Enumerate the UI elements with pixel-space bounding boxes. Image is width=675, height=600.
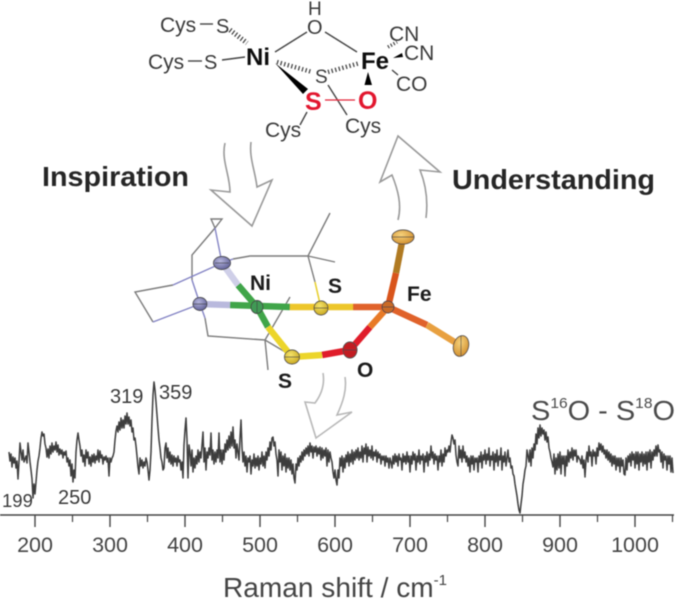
x axis tick labels: 500 (242, 533, 278, 557)
arrow: understanding, pointing up (380, 136, 440, 220)
red S-O unit with wedge bonds (275, 63, 377, 125)
diagram: crystal structure of the Ni-Fe complex (135, 213, 471, 393)
ligand bonds to nitrogen (153, 228, 233, 322)
peak labels: 250 (58, 487, 91, 509)
Cys-S ligands on Ni: S (216, 16, 229, 38)
x axis tick labels (17, 533, 659, 557)
Cys-S ligands on Ni: Cys (148, 51, 184, 74)
spectrum trace (9, 382, 673, 513)
ligand wireframe (135, 213, 335, 370)
atom labels (250, 272, 432, 393)
arrow: spectrum to model, pointing down (305, 373, 352, 438)
spectrum legend: S16O - S18O: 16 (550, 395, 568, 412)
CN and CO ligands on Fe: CN (404, 42, 434, 65)
Fe label: Fe (361, 48, 389, 75)
lower Cys labels (265, 115, 381, 142)
CN and CO ligands on Fe: CN (389, 23, 419, 46)
x axis tick labels: 900 (542, 533, 578, 557)
atom labels: S (328, 275, 342, 298)
lower Cys labels: Cys (345, 115, 381, 138)
x axis tick labels: 1000 (611, 533, 659, 557)
atom labels: Ni (250, 272, 271, 295)
spectrum legend: S16O - S18O: S (531, 395, 550, 426)
metal-ligand bonds (200, 237, 461, 357)
spectrum legend: S16O - S18O: O (652, 395, 675, 426)
x axis tick labels: 800 (467, 533, 503, 557)
CN and CO ligands on Fe (388, 23, 434, 96)
atoms (193, 230, 471, 364)
heading: Inspiration: Inspiration (42, 161, 189, 192)
diagram: Ni-Fe active site chemical structure (148, 0, 434, 142)
heading: Understanding: Understanding (452, 164, 655, 195)
Ni label: Ni (246, 44, 270, 71)
CN and CO ligands on Fe: CO (396, 73, 428, 96)
x axis title: -1 (434, 572, 447, 589)
x axis tick labels: 400 (167, 533, 203, 557)
x axis with ticks (0, 515, 674, 527)
red S-O unit with wedge bonds: S (305, 88, 322, 116)
Cys-S ligands on Ni (148, 14, 247, 74)
x axis tick labels: 600 (317, 533, 353, 557)
arrow: inspiration, pointing down (211, 142, 272, 226)
peak labels: 319 (110, 386, 143, 408)
lower Cys labels: Cys (265, 119, 301, 142)
spectrum legend: S16O - S18O: 18 (635, 395, 652, 412)
x axis tick labels: 200 (17, 533, 53, 557)
peak labels: 199 (2, 490, 33, 511)
chart: Raman difference spectrum (0, 382, 675, 600)
red S-O unit with wedge bonds: O (358, 87, 377, 115)
Cys-S ligands on Ni: S (204, 52, 217, 74)
peak labels (2, 382, 192, 511)
atom labels: Fe (407, 283, 432, 306)
peak labels: 359 (159, 382, 192, 404)
bridging S with hashed bonds (277, 62, 360, 115)
atom labels: O (357, 359, 373, 382)
bridging OH: O (307, 17, 323, 39)
x axis tick labels: 300 (92, 533, 128, 557)
bridging OH (275, 0, 357, 52)
atom labels: S (278, 370, 292, 393)
bridging S with hashed bonds: S (315, 67, 328, 88)
x axis tick labels: 700 (392, 533, 428, 557)
Cys-S ligands on Ni: Cys (160, 14, 196, 37)
spectrum legend: S16O - S18O: O - S (568, 395, 635, 426)
